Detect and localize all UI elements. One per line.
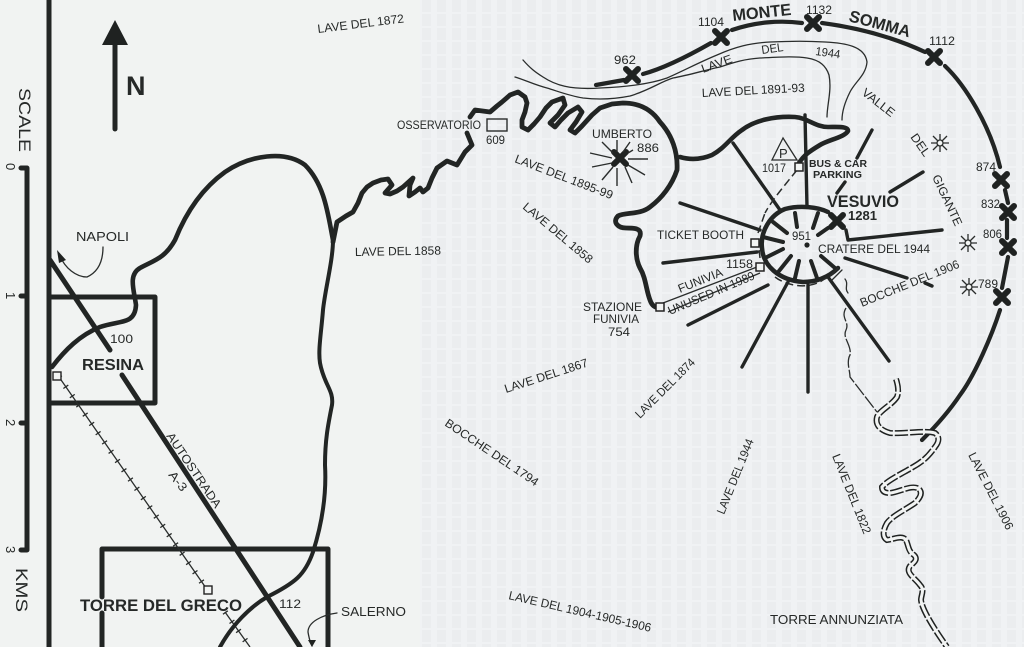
Vesuvio area labels: 1017 [762, 161, 786, 175]
scale bar: SCALE [15, 88, 34, 152]
scale bar: 0 [3, 163, 18, 170]
ridge labels: 1132 [806, 3, 832, 17]
lava labels: LAVE DEL 1891-93 [701, 81, 805, 100]
Torre del Greco town box [102, 549, 328, 647]
Vesuvio area labels: FUNIVIA [593, 312, 639, 326]
lava labels: BOCCHE DEL 1906 [858, 257, 962, 310]
ridge labels: 1104 [698, 15, 724, 29]
Vesuvio summit mark [831, 215, 843, 227]
place labels [76, 229, 903, 627]
ridge labels [614, 1, 1002, 291]
place labels: RESINA [82, 357, 144, 374]
Vesuvio area labels: 1158 [726, 257, 753, 271]
Vesuvio area labels: UMBERTO [592, 127, 652, 141]
lava labels: LAVE DEL 1944 [714, 436, 757, 516]
Vesuvio area labels: STAZIONE [583, 300, 642, 314]
ridge labels: 962 [614, 53, 636, 67]
lava labels: LAVE DEL 1874 [632, 355, 698, 421]
lava labels: LAVE DEL 1822 [829, 452, 874, 536]
Resina town box [49, 297, 155, 403]
parking triangle icon [772, 138, 797, 161]
Monte Somma ridge [596, 17, 1014, 440]
place labels: 112 [279, 597, 301, 611]
station squares [656, 163, 803, 311]
place labels: A-3 [166, 468, 190, 494]
Vesuvio area labels: FUNIVIA [676, 265, 725, 296]
Vesuvio area labels: 609 [486, 133, 505, 147]
lava labels: LAVE DEL 1858 [355, 243, 441, 259]
Vesuvio area labels: 754 [608, 325, 630, 339]
Napoli arrow [57, 247, 103, 277]
Vesuvio area labels: 951 [792, 229, 811, 243]
Vesuvio area labels: OSSERVATORIO [397, 120, 481, 132]
place labels: TORRE DEL GRECO [80, 597, 242, 615]
north arrow: N [126, 71, 146, 101]
lava labels: LAVE [699, 52, 734, 76]
lava labels: LAVE DEL 1872 [317, 11, 405, 36]
road: western loop [52, 156, 333, 367]
road: south to Torre del Greco [220, 240, 333, 647]
Valle del Gigante vents [931, 134, 978, 296]
lava labels: LAVE DEL 1858 [520, 200, 596, 266]
Osservatorio box [487, 119, 507, 131]
Vesuvio area labels: VESUVIO [827, 193, 899, 211]
Valle del Gigante label [859, 85, 965, 228]
Vesuvio area labels: 1281 [848, 208, 877, 223]
Valle del Gigante label: GIGANTE [929, 172, 965, 228]
ridge labels: 806 [983, 227, 1002, 241]
north arrow [102, 20, 146, 129]
Salerno arrow [308, 613, 337, 647]
Vesuvio area labels: CRATERE DEL 1944 [818, 242, 930, 256]
road: hairpins to Stazione Funivia [470, 92, 677, 308]
railway [53, 372, 250, 647]
lava labels: LAVE DEL 1895-99 [513, 152, 615, 202]
scale bar: 1 [3, 292, 18, 299]
road: hairpins to Osservatorio [333, 133, 472, 242]
lava labels: LAVE DEL 1906 [965, 450, 1017, 532]
Vesuvio area labels: PARKING [813, 169, 862, 181]
place labels: 100 [110, 332, 133, 346]
ridge labels: 1112 [929, 34, 955, 48]
parking triangle icon: P [779, 146, 788, 161]
1944 lava flow outlines [515, 41, 867, 120]
lava labels: 1944 [815, 44, 842, 61]
place labels: TORRE ANNUNZIATA [770, 612, 903, 627]
lava labels: DEL [760, 40, 785, 57]
lava labels: BOCCHE DEL 1794 [442, 416, 542, 489]
radial lava rays [663, 115, 942, 392]
Vesuvio area labels: 886 [637, 141, 659, 155]
lava labels [317, 11, 1017, 635]
ridge labels: 832 [981, 197, 1000, 211]
place labels: NAPOLI [76, 229, 129, 244]
Valle del Gigante label: DEL [908, 131, 934, 159]
ridge labels: SOMMA [847, 7, 913, 41]
scale bar: KMS [12, 568, 31, 612]
scale bar: 3 [3, 546, 18, 553]
Vesuvio area labels: UNUSED IN 1989 [666, 268, 757, 318]
road: to Bus and Car parking [680, 117, 848, 163]
1822 lava flow double dashed road [877, 379, 947, 647]
scale bar: 2 [3, 419, 18, 426]
crater [758, 207, 848, 293]
funivia line [663, 267, 760, 312]
path from parking to crater [765, 170, 797, 213]
autostrada A-3 [50, 260, 300, 647]
place labels: AUTOSTRADA [164, 430, 224, 511]
Vesuvio area labels: BUS & CAR [809, 158, 867, 170]
lava labels: LAVE DEL 1904-1905-1906 [507, 588, 653, 635]
ridge labels: 874 [976, 160, 996, 174]
Vesuvio area labels [397, 120, 930, 339]
thin wavy track [844, 308, 877, 412]
Umberto summit mark with rays [590, 140, 648, 186]
Valle del Gigante label: VALLE [859, 85, 898, 120]
lava labels: LAVE DEL 1867 [503, 356, 590, 396]
scale bar [3, 88, 34, 612]
ridge labels: MONTE [732, 1, 792, 25]
summit marks [626, 17, 1014, 303]
place labels: SALERNO [341, 604, 406, 619]
left border road [46, 0, 52, 647]
Vesuvio area labels: TICKET BOOTH [657, 228, 744, 242]
ridge labels: 789 [978, 277, 998, 291]
